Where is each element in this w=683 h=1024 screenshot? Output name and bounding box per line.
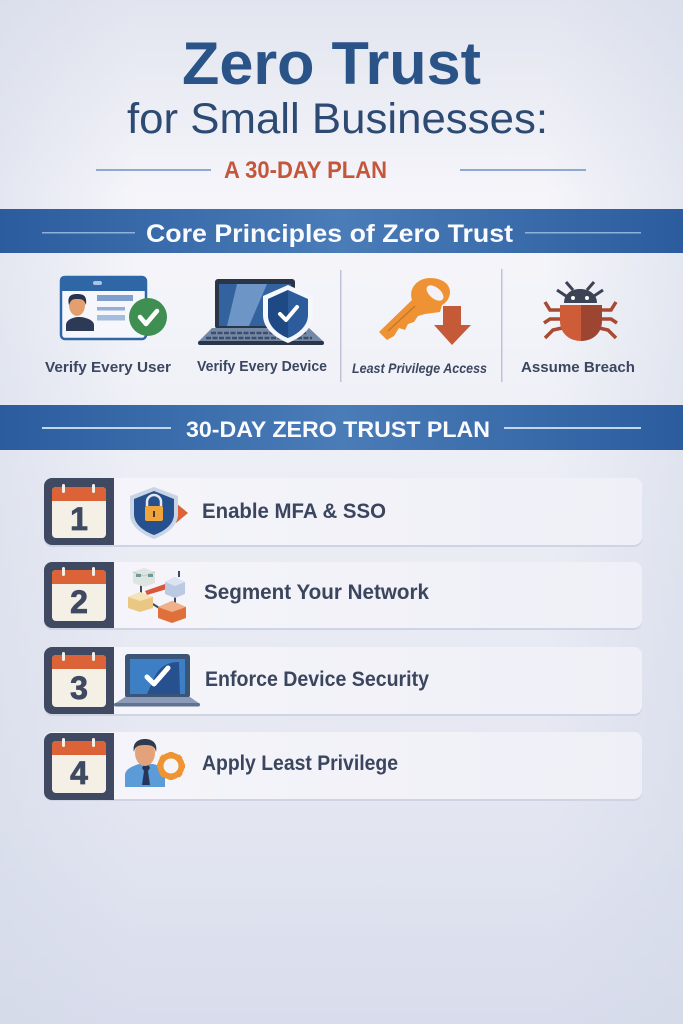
- day badge 3: 3: [70, 670, 88, 706]
- section banner: core principles: [0, 209, 683, 253]
- icon: ID card with check: [60, 276, 167, 339]
- day badge 4: [44, 733, 114, 800]
- day badge 3: [44, 647, 114, 714]
- day badge 1: [44, 478, 114, 545]
- section banner: 30-day plan: [0, 405, 683, 450]
- divider: [340, 270, 342, 382]
- banner heading: 30-DAY ZERO TRUST PLAN: [186, 417, 490, 442]
- icon: laptop with shield: [198, 279, 324, 345]
- day badge 1: 1: [70, 501, 88, 537]
- panel: step 3: [44, 647, 642, 716]
- panel: step 1: [44, 478, 642, 547]
- banner heading: Core Principles of Zero Trust: [146, 220, 514, 248]
- title line: Zero Trust: Zero Trust: [182, 30, 481, 97]
- icon: network segments: [128, 568, 186, 623]
- title: [127, 30, 548, 143]
- panel: step 2: [44, 562, 642, 630]
- icon: bug: [544, 282, 617, 341]
- panel: core principles: [45, 269, 635, 382]
- step text: Apply Least Privilege: [202, 752, 398, 775]
- day badge 4: 4: [70, 755, 88, 791]
- divider: [501, 269, 502, 382]
- subtitle text: A 30-DAY PLAN: [224, 157, 387, 184]
- label: assume breach: Assume Breach: [521, 359, 635, 376]
- label: least privilege access: Least Privilege Access: [352, 360, 487, 376]
- day badge 2: 2: [70, 584, 88, 620]
- icon: person with gear: [125, 739, 185, 787]
- step text: Segment Your Network: [204, 581, 429, 604]
- icon: shield with padlock: [130, 487, 188, 539]
- icon: key with down arrow: [379, 278, 471, 345]
- day badge 2: [44, 562, 114, 628]
- title line: for Small Businesses: for Small Businesses:: [127, 95, 548, 143]
- step text: Enforce Device Security: [205, 668, 429, 691]
- step text: Enable MFA & SSO: [202, 500, 386, 523]
- label: verify every device: Verify Every Device: [197, 358, 327, 375]
- label: verify every user: Verify Every User: [45, 359, 171, 376]
- panel: step 4: [44, 732, 642, 801]
- icon: laptop with check: [114, 654, 200, 706]
